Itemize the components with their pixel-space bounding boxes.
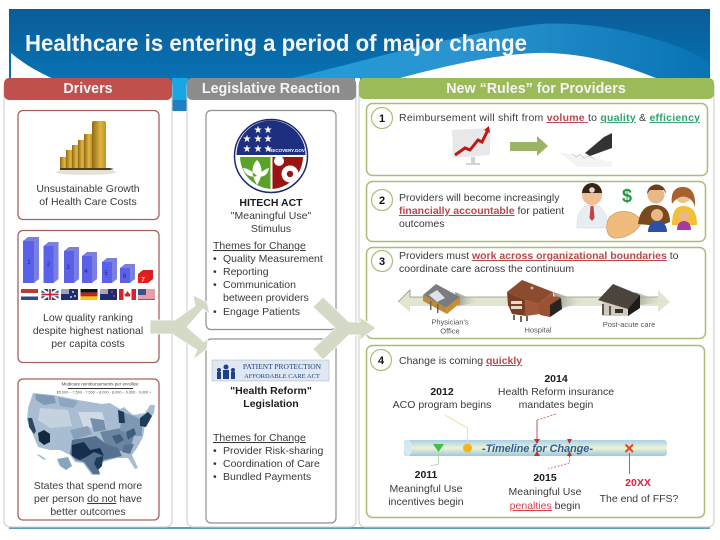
map: US healthcare spending: $5,000 – 7,500 · 7,500 – 8,000 · 8,000 – 9,000 · 9,000 +: [57, 390, 152, 394]
milestone 2012: ACO program begins: [393, 399, 491, 411]
rule 3: Hospital: [524, 326, 552, 334]
themes list: Reporting: [223, 266, 269, 278]
icon: recovery seal: ★: [254, 134, 263, 145]
bar chart: quality rank: 6: [123, 274, 127, 280]
new rules heading: [359, 78, 714, 99]
milestone 2014: Health Reform insurance: [498, 386, 614, 398]
act name: [230, 385, 312, 410]
act name: [231, 197, 311, 235]
caption: [34, 480, 142, 518]
arrow: drivers to legislation: [150, 295, 210, 360]
icon: rising chart monitor: [452, 126, 490, 165]
rule 2 text: financially accountable for patient: [399, 205, 564, 217]
themes list: between providers: [223, 292, 309, 304]
themes list: Communication: [223, 279, 296, 291]
rule 1: [366, 104, 708, 176]
panel: legislative reaction: [187, 78, 356, 527]
caption: better outcomes: [50, 506, 126, 518]
icon: recovery seal: ★: [264, 125, 273, 136]
icon: doctor family handshake: [577, 183, 697, 238]
number badge 3: [372, 250, 392, 272]
icon: recovery seal: ★: [254, 125, 263, 136]
act name: Legislation: [243, 398, 299, 410]
icon: recovery seal: ★: [254, 144, 263, 155]
icon: recovery seal: RECOVERY.GOV: [269, 148, 305, 153]
act name: "Meaningful Use": [231, 210, 311, 222]
icon: recovery seal: ★: [243, 134, 252, 145]
number badge 2: [372, 190, 392, 210]
bar chart: quality rank: 7: [141, 278, 145, 284]
rule 2 text: [399, 192, 564, 230]
milestone 20XX: 20XX: [625, 477, 651, 489]
milestone 20XX: [600, 444, 679, 505]
rule 3: Physician's: [431, 318, 469, 326]
themes list: •: [213, 458, 217, 470]
logo: patient protection act: AFFORDABLE CARE ACT: [244, 373, 320, 380]
logo: patient protection act: PATIENT PROTECTION: [243, 362, 322, 371]
card: state spending map: [18, 379, 159, 520]
icon: recovery seal: [234, 120, 308, 192]
milestone 2011: [388, 444, 464, 508]
icon: doctor family handshake: $: [622, 186, 632, 206]
themes list: •: [213, 279, 217, 291]
bar chart: quality rank: 3: [66, 265, 70, 271]
milestone 2011: 2011: [415, 469, 438, 481]
icon: recovery seal: ★: [264, 134, 273, 145]
caption: Unsustainable Growth: [36, 183, 140, 195]
icon: physician office: [423, 284, 480, 314]
caption: States that spend more: [34, 480, 142, 492]
caption: of Health Care Costs: [39, 196, 137, 208]
caption: per person do not have: [34, 493, 142, 505]
rule 3: Post-acute care: [603, 320, 655, 329]
card: low quality ranking: [18, 230, 159, 362]
rule 4: [366, 346, 704, 518]
milestone 2015: 2015: [533, 472, 557, 484]
themes list: Engage Patients: [223, 306, 300, 318]
number badge 4: [370, 350, 392, 370]
themes list: [213, 240, 323, 318]
rule 1 text: Reimbursement will shift from volume to quality & efficiency: [399, 112, 700, 124]
rule 3: [366, 248, 706, 338]
bar chart: quality rank: [23, 237, 153, 284]
themes list: Bundled Payments: [223, 471, 311, 483]
bar chart: quality rank: 4: [84, 269, 88, 275]
themes list: •: [213, 253, 217, 265]
act name: "Health Reform": [230, 385, 312, 397]
header banner: [9, 9, 710, 111]
milestone 2015: Meaningful Use: [509, 486, 582, 498]
themes list: [213, 432, 324, 483]
act name: HITECH ACT: [239, 197, 303, 209]
rule 2: [366, 182, 706, 242]
drivers heading: Drivers: [63, 81, 113, 97]
milestone 2015: penalties begin: [510, 500, 580, 512]
rule 3 text: Providers must work across organizational boundaries to: [399, 250, 679, 262]
caption: [33, 312, 143, 350]
rule 3 text: [399, 250, 679, 275]
icon: pen signing: [558, 133, 612, 167]
themes list: •: [213, 471, 217, 483]
arrow: legislation to rules: [313, 297, 376, 360]
rule 2 text: Providers will become increasingly: [399, 192, 560, 204]
timeline: [388, 373, 679, 512]
milestone 2014: [498, 373, 614, 456]
map: US healthcare spending: Medicare reimbursements per enrollee: [61, 382, 139, 386]
icon: recovery seal: ★: [243, 144, 252, 155]
caption: per capita costs: [51, 338, 125, 350]
flags: [21, 289, 155, 300]
milestone 2014: mandates begin: [519, 399, 594, 411]
themes list: Coordination of Care: [223, 458, 320, 470]
number badge 1: 1: [379, 113, 385, 125]
number badge 4: 4: [378, 355, 385, 367]
rule 3 text: coordinate care across the continuum: [399, 263, 574, 275]
card: HITECH act: [206, 110, 336, 330]
rule 2 text: outcomes: [399, 218, 445, 230]
bar chart: quality rank: 2: [47, 262, 51, 268]
map: US healthcare spending: [27, 382, 155, 475]
caption: despite highest national: [33, 325, 143, 337]
themes list: Provider Risk-sharing: [223, 445, 324, 457]
caption: Low quality ranking: [43, 312, 133, 324]
bar chart: quality rank: 1: [27, 260, 31, 266]
themes list: •: [213, 445, 217, 457]
icon: recovery seal: ★: [264, 144, 273, 155]
bar chart: quality rank: 5: [104, 271, 108, 277]
timeline: -Timeline for Change-: [482, 443, 593, 455]
themes list: •: [213, 266, 217, 278]
card: unsustainable growth: [18, 110, 159, 220]
icon: rising gold bars: [56, 121, 116, 175]
legislative reaction heading: [187, 78, 356, 100]
rule 4 text: Change is coming quickly: [399, 355, 522, 367]
icon: hospital: [507, 280, 585, 322]
caption: [36, 183, 140, 208]
arrow: care continuum: [398, 290, 670, 312]
milestone 2012: [393, 386, 491, 452]
milestone 20XX: The end of FFS?: [600, 493, 679, 505]
milestone 2012: 2012: [430, 386, 454, 398]
milestone 2014: 2014: [544, 373, 568, 385]
themes list: Themes for Change: [213, 432, 306, 444]
panel: new rules for providers: [359, 78, 714, 527]
panel: drivers: [4, 78, 172, 527]
new rules heading: New “Rules” for Providers: [446, 81, 626, 97]
logo: patient protection act: [212, 360, 329, 381]
milestone 2011: Meaningful Use: [390, 483, 463, 495]
act name: Stimulus: [251, 223, 291, 235]
themes list: Quality Measurement: [223, 253, 323, 265]
title: Healthcare is entering a period of major change: [25, 30, 527, 56]
bottom rule: [9, 527, 710, 529]
card: health reform legislation: [206, 339, 336, 523]
themes list: •: [213, 306, 217, 318]
drivers heading: [4, 78, 172, 100]
rule 3: Office: [440, 326, 460, 336]
legislative reaction heading: Legislative Reaction: [202, 81, 340, 97]
milestone 2011: incentives begin: [388, 496, 464, 508]
milestone 2015: [509, 439, 582, 512]
number badge 3: 3: [379, 256, 385, 268]
icon: post-acute house: [598, 284, 665, 316]
themes list: Themes for Change: [213, 240, 306, 252]
arrow: green shift: [510, 136, 548, 156]
number badge 2: 2: [379, 195, 385, 207]
number badge 1: [372, 108, 392, 128]
